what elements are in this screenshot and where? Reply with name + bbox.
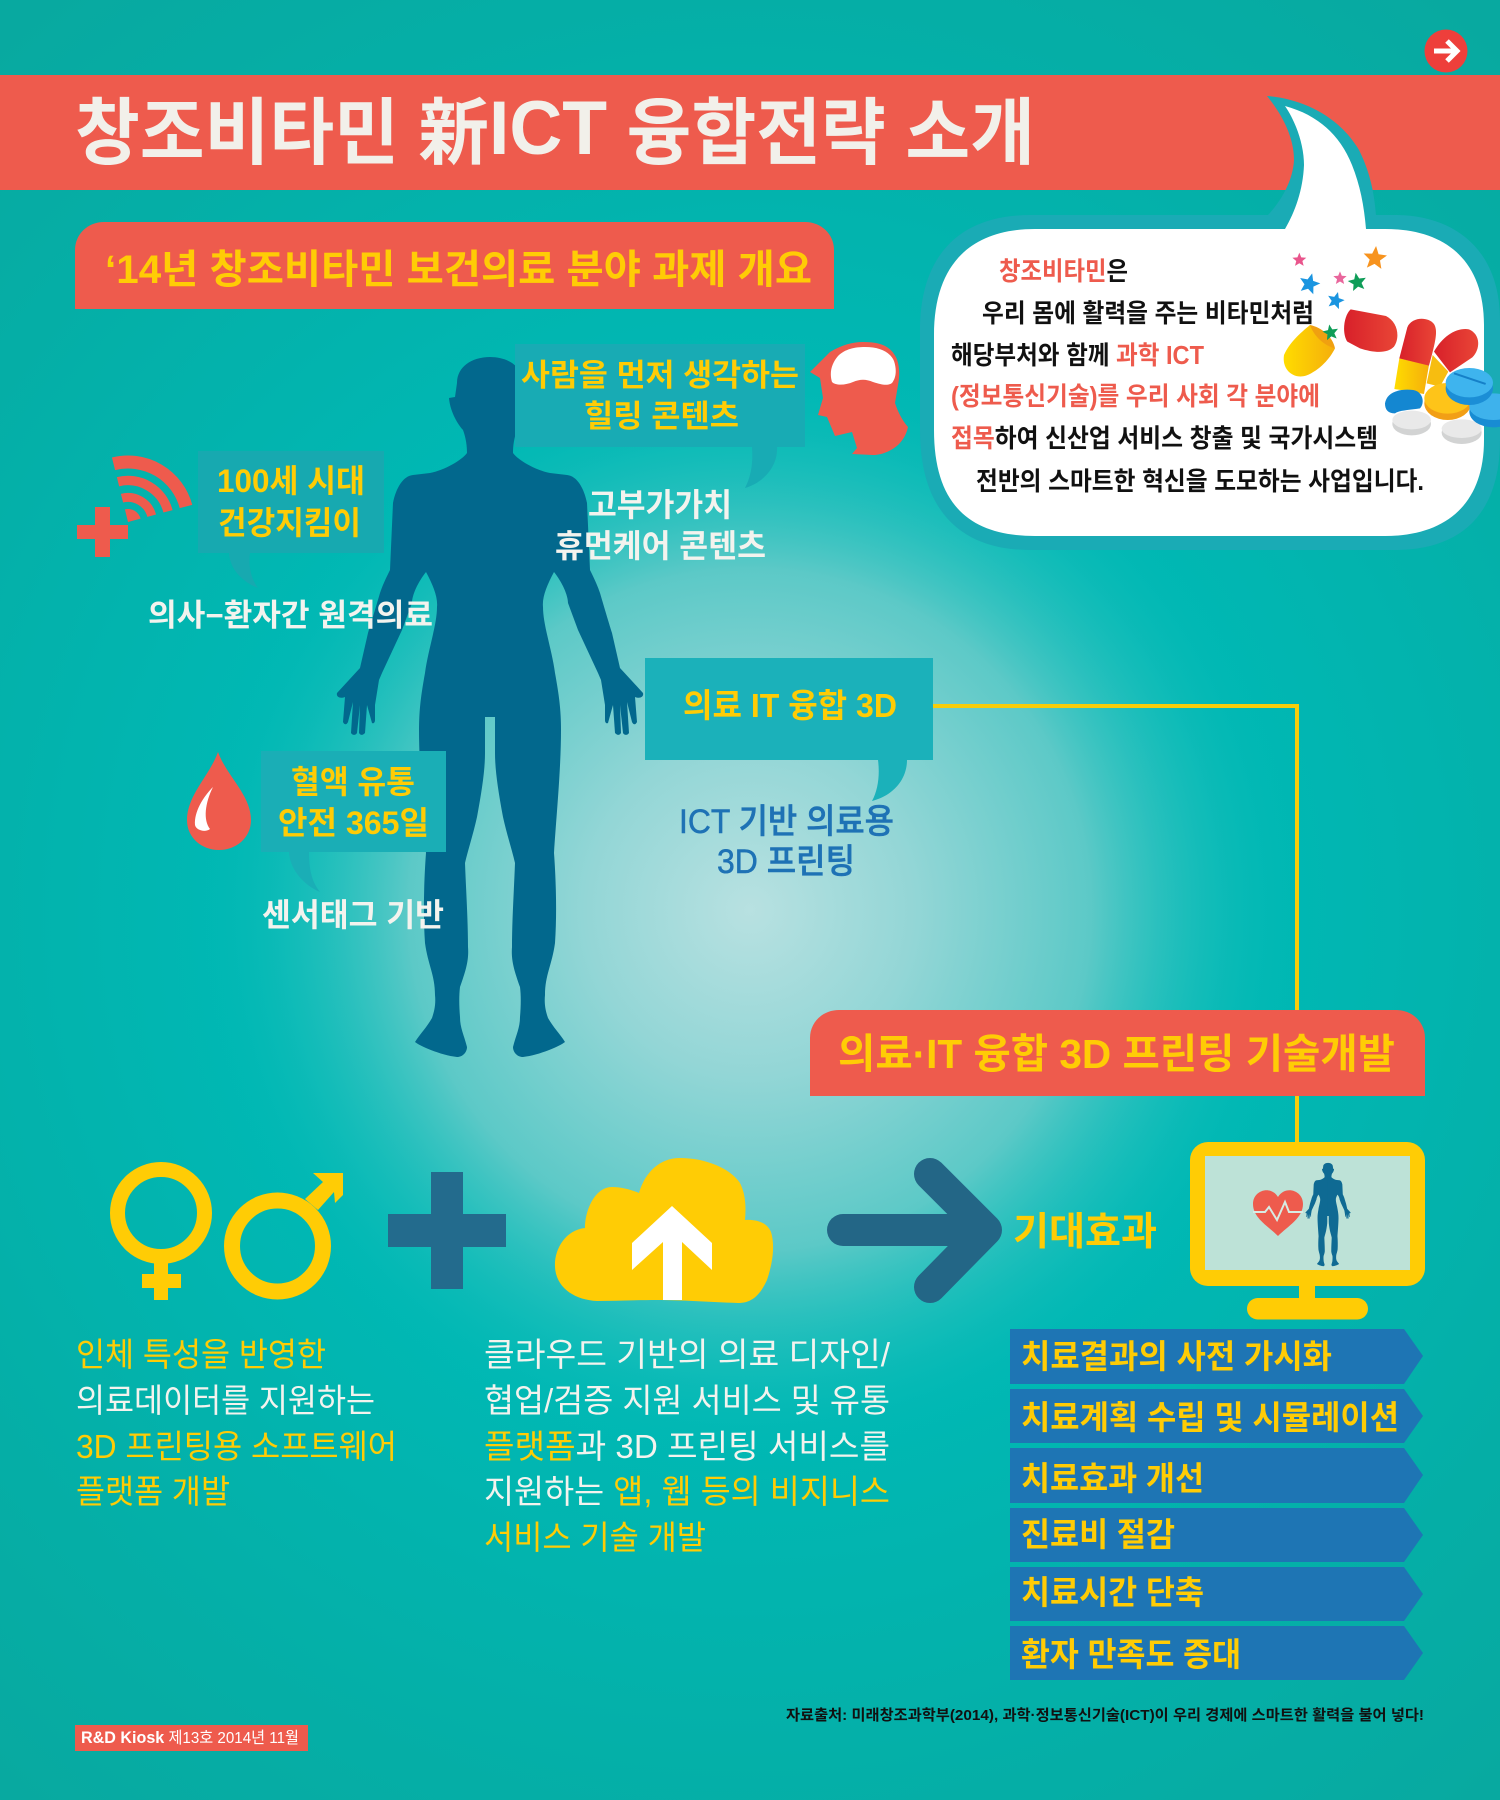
caption: human care: 휴먼케어 콘텐츠 [555, 528, 766, 564]
caption: human care [555, 487, 766, 564]
effect 3: 치료효과 개선 [1021, 1460, 1204, 1497]
panel: medical IT 3D: 의료 IT 융합 3D [683, 687, 897, 724]
panel: healing content [515, 344, 805, 564]
effect 5: 치료시간 단축 [1021, 1574, 1204, 1611]
caption: sensor tag: 센서태그 기반 [262, 897, 444, 933]
effect 6 [1010, 1626, 1423, 1680]
effect 4: 진료비 절감 [1021, 1516, 1175, 1553]
text block: cloud service [484, 1336, 891, 1556]
bubble text: 전반의 스마트한 혁신을 도모하는 사업입니다. [976, 468, 1424, 496]
icon: gender symbols [118, 1170, 343, 1300]
effect 5 [1010, 1567, 1423, 1621]
effect 3 [1010, 1448, 1423, 1503]
icon: cloud upload [555, 1158, 773, 1303]
text block: cloud service: 플랫폼과 3D 프린팅 서비스를 [484, 1428, 890, 1465]
title text: 융합전략 소개 [607, 93, 1035, 174]
caption: 3D printing [679, 803, 894, 881]
text block: cloud service: 클라우드 기반의 의료 디자인/ [484, 1336, 891, 1373]
title text: ICT [489, 86, 607, 171]
label: expected effects: 기대효과 [1013, 1211, 1157, 1254]
heading: 3D printing technology: 의료·IT 융합 3D 프린팅 기술개발 [838, 1031, 1395, 1077]
bubble text: 우리 몸에 활력을 주는 비타민처럼 [982, 300, 1314, 328]
icon: head with brain [810, 342, 908, 455]
panel: 100-year health keeper [198, 451, 384, 588]
heading: 2014 project overview [75, 222, 834, 309]
human body silhouette [337, 357, 643, 1057]
connector line [933, 706, 1297, 1142]
speech bubble: 창조비타민 definition [920, 96, 1500, 550]
publication tag: R&D Kiosk 제13호 2014년 11월 [81, 1728, 299, 1747]
icon: arrow [843, 1174, 986, 1287]
effect 4 [1010, 1508, 1423, 1562]
text block: software platform: 플랫폼 개발 [76, 1473, 230, 1510]
text block: software platform: 의료데이터를 지원하는 [76, 1382, 375, 1419]
bubble text [951, 258, 1424, 496]
panel: healing content: 사람을 먼저 생각하는 [521, 358, 799, 393]
text block: software platform: 인체 특성을 반영한 [76, 1336, 326, 1373]
bubble text: 해당부처와 함께 과학 ICT [951, 342, 1204, 370]
panel: 100-year health keeper: 100세 시대 [217, 463, 365, 499]
text block: cloud service: 지원하는 앱, 웹 등의 비지니스 [484, 1473, 890, 1510]
text block: software platform [76, 1336, 397, 1510]
icon: plus [388, 1172, 506, 1289]
panel: medical IT 3D [645, 658, 933, 881]
text block: software platform: 3D 프린팅용 소프트웨어 [76, 1428, 397, 1465]
panel: blood distribution: 안전 365일 [278, 805, 429, 841]
icon: medical cross with wifi [77, 462, 186, 557]
text block: cloud service: 협업/검증 지원 서비스 및 유통 [484, 1382, 890, 1419]
effect 2 [1010, 1389, 1423, 1443]
panel: 100-year health keeper: 건강지킴이 [218, 505, 361, 541]
effect 6: 환자 만족도 증대 [1021, 1636, 1241, 1673]
title text: 창조비타민 新 [75, 93, 504, 174]
source note: 자료출처: 미래창조과학부(2014), 과학·정보통신기술(ICT)이 우리 경제에 스마트한 활력을 불어 넣다! [786, 1707, 1424, 1724]
effect 1: 치료결과의 사전 가시화 [1021, 1338, 1332, 1375]
icon: monitor with heart and body [1190, 1142, 1425, 1320]
caption: 3D printing: 3D 프린팅 [717, 843, 855, 881]
caption: 3D printing: ICT 기반 의료용 [679, 803, 894, 841]
caption: remote care: 의사−환자간 원격의료 [148, 598, 433, 633]
panel: blood distribution [261, 751, 446, 892]
caption: human care: 고부가가치 [588, 487, 732, 523]
heading: 2014 project overview: ‘14년 창조비타민 보건의료 분야 과제 개요 [105, 248, 812, 292]
bubble text: 창조비타민은 [999, 258, 1128, 286]
icon: blood drop [187, 752, 251, 850]
panel: blood distribution: 혈액 유통 [291, 764, 415, 800]
bubble text: 접목하여 신산업 서비스 창출 및 국가시스템 [951, 425, 1378, 453]
top-right arrow button [1424, 30, 1468, 72]
bubble text: (정보통신기술)를 우리 사회 각 분야에 [951, 383, 1320, 411]
text block: cloud service: 서비스 기술 개발 [484, 1519, 706, 1556]
heading: 3D printing technology [810, 1010, 1425, 1096]
list: expected effects [1010, 1329, 1423, 1680]
panel: healing content: 힐링 콘텐츠 [584, 399, 739, 434]
effect 1 [1010, 1329, 1423, 1384]
title banner [0, 75, 1500, 190]
icon: pills and stars [1284, 245, 1500, 444]
effect 2: 치료계획 수립 및 시뮬레이션 [1021, 1399, 1399, 1436]
